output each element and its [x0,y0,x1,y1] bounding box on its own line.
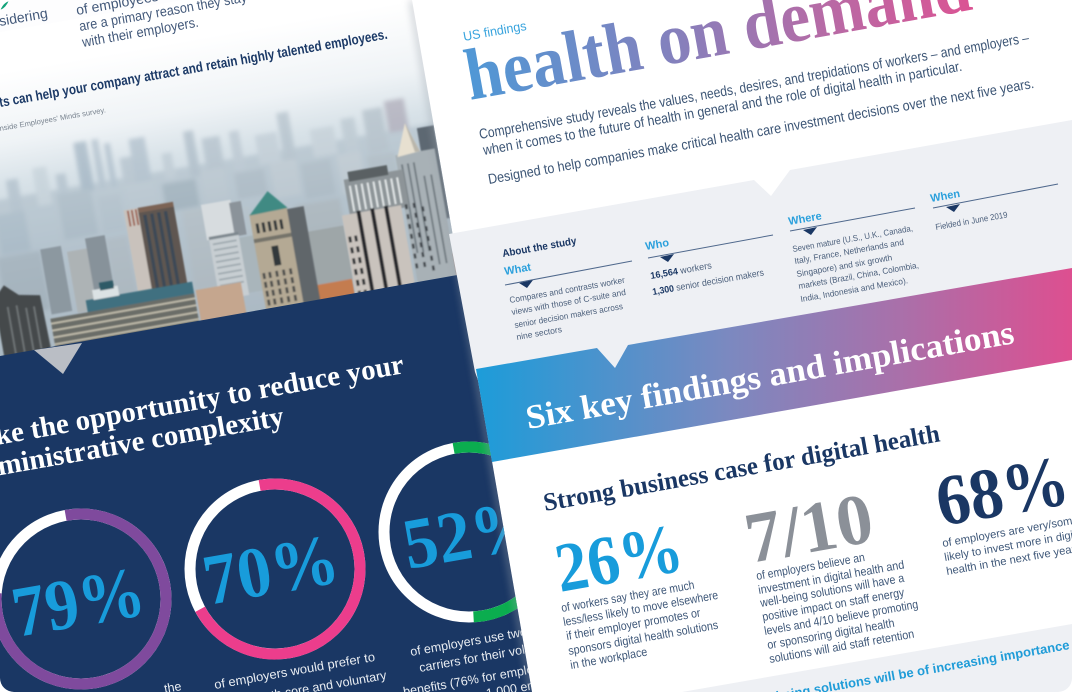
distant skyline [0,96,452,310]
column: who: Who [644,237,670,253]
stat: 7/10: 7/10 [739,478,879,579]
column: where: Seven mature (U.S., U.K., Canada, [792,223,913,254]
text block: 52% caption: carriers for their voluntary [418,636,561,675]
text block: attract and retain statement: ts can help your company attract and retain highly talented employees. [0,26,389,110]
column: who: 1,300 senior decision makers [651,266,765,297]
chart: 52% ring: 52% [397,482,545,585]
column: where: India, Indonesia and Mexico). [800,275,909,304]
text block: 7/10 caption: investment in digital health and [757,557,905,597]
column: who [644,235,773,297]
chart: 52% ring [378,442,518,622]
chart: 79% ring [0,501,179,692]
text block: 52% caption: of employers use two [409,625,528,659]
building: brown tower [124,201,188,292]
stat: 7/10 [739,478,919,666]
text block: 26% caption: of workers say they are much [560,578,695,615]
panel: right brochure page [449,0,1072,692]
panel: six key findings band [476,268,1072,462]
text block: 7/10 caption: levels and 4/10 believe promoting [763,597,919,638]
text block: 7/10 caption [755,550,919,666]
stat: 26%: 26% [549,510,689,608]
column: who: 16,564 workers [649,259,713,281]
text block: 7/10 caption: solutions will aid staff retention [768,627,915,666]
column: what: What [503,261,532,278]
column: what: senior decision makers across [514,301,624,330]
column: where [787,208,919,304]
text block: 7/10 caption: positive impact on staff energy [761,585,905,624]
heading: six key findings: Six key findings and implications [523,314,1017,437]
text block: 52% caption [403,630,530,692]
column: what: views with those of C-suite and [511,287,627,317]
column: where: Italy, France, Netherlands and [794,237,905,266]
icon: green ring fragment [0,1,8,10]
text block: 7/10 caption: or sponsoring digital health [766,616,896,652]
panel: navy section [0,271,585,692]
icon: grey notch triangle [34,343,82,374]
column: what: nine sectors [516,324,563,342]
buildings mid ground [40,124,457,320]
chart: 79% ring: 79% [6,551,151,653]
panel: about the study [449,120,1072,440]
chart: 70% ring [184,478,366,660]
column: when: Fielded in June 2019 [935,209,1008,232]
text block: 26% caption [560,578,719,672]
chart: 70% ring: 70% [197,518,345,621]
column: what [503,261,632,342]
text block: employees reason: with their employers. [80,14,200,50]
text block: 7/10 caption: of employers believe an [755,550,866,583]
photo: city skyline [0,45,457,356]
text block: 26% caption: if their employer promotes or [565,606,701,643]
text block: 7/10 caption: well-being solutions will have a [758,571,906,610]
text block: employees reason [75,0,248,50]
column: what: Compares and contrasts worker [509,275,626,305]
text block: 26% caption: less/less likely to move elsewhere [562,588,719,629]
column: where: markets (Brazil, China, Colombia, [798,260,919,291]
building: dark foreground left [0,284,52,356]
column: when [929,184,1058,232]
text block: intro: when it comes to the future of health in general and the role of digital health in particular. [481,59,963,159]
heading: strong business case: Strong business case for digital health [541,419,942,517]
panel: left brochure page [0,0,585,692]
text block: 26% caption: in the workplace [569,645,649,672]
text block: source note: nside Employees' Minds survey. [0,105,106,133]
building: low teal-roofed block [50,280,200,346]
column: where: Where [787,210,823,228]
text block: 70% caption: of employers would prefer to [213,650,376,692]
page edge shadow [412,0,532,692]
heading: about the study: About the study [501,235,578,260]
stat: 26% [549,510,719,672]
text block: 26% caption: sponsors digital health solutions [567,618,719,658]
text block: US findings label: US findings [462,18,528,44]
column: where: Singapore) and six growth [796,252,893,279]
text block: 68% caption [941,510,1072,578]
building: ornate tower with green roof [248,190,321,309]
building: tall pale tower with spire [342,124,457,293]
panel: bottom callout band [636,624,1072,692]
column: when: When [929,188,961,205]
